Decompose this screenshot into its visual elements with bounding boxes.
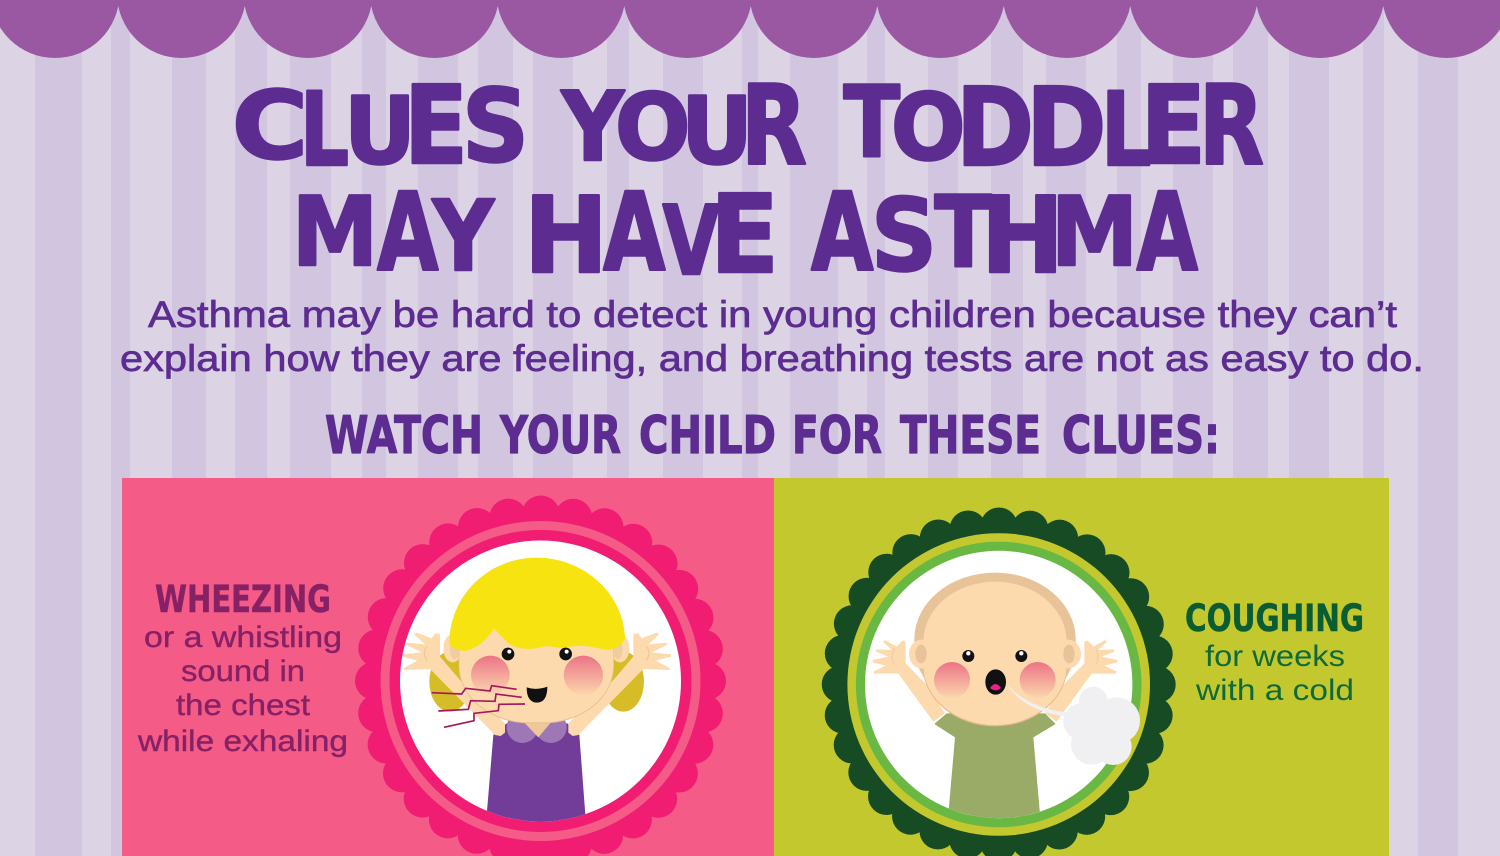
title line 1: R (1199, 62, 1264, 190)
title line 2: H (524, 175, 608, 297)
badge: wheezing girl (368, 509, 712, 853)
title line 1: D (1026, 66, 1106, 191)
intro paragraph: explain how they are feeling, and breathing tests are not as easy to do. (120, 338, 1424, 379)
title line 1: E (1140, 64, 1206, 189)
title line 1: L (300, 71, 349, 190)
title line 1: D (956, 66, 1034, 191)
title line 2: H (981, 175, 1064, 297)
wheezing description (137, 621, 348, 758)
title line 1: C (232, 72, 308, 181)
wheezing description: while exhaling (137, 725, 348, 758)
wheezing description: or a whistling (144, 621, 342, 654)
icon: wheeze lines (432, 686, 525, 727)
title line 2: M (1051, 178, 1138, 288)
wheezing description: sound in (181, 655, 305, 688)
coughing description: for weeks (1205, 640, 1345, 673)
subheading: YOUR (499, 406, 621, 466)
panel: wheezing (122, 478, 774, 856)
title line 1: S (462, 67, 529, 185)
title line 2: A (377, 171, 439, 296)
title line 2: A (811, 171, 874, 296)
curtain scallops (0, 0, 1500, 58)
title line 1: E (404, 64, 468, 189)
coughing description (1195, 640, 1354, 707)
title line 2: V (662, 187, 720, 297)
wheezing description: the chest (176, 689, 311, 722)
subheading: FOR (792, 406, 882, 466)
icon: baby (873, 573, 1140, 833)
wheezing heading: WHEEZING (155, 578, 331, 621)
panel: coughing (774, 478, 1389, 856)
title line 2: S (871, 177, 937, 294)
icon: cough puff (1007, 684, 1140, 765)
intro paragraph (120, 294, 1424, 379)
title line 2: T (934, 176, 992, 290)
title line 1: Y (561, 73, 625, 183)
badge: coughing baby (834, 520, 1164, 850)
subheading: THESE (900, 406, 1041, 466)
title line 1: U (681, 77, 753, 185)
title line 1: O (615, 74, 690, 181)
subheading: CHILD (639, 406, 776, 466)
title line 1: O (891, 74, 966, 181)
title line 2: M (292, 178, 378, 288)
title line 2: A (603, 171, 666, 296)
coughing description: with a cold (1195, 674, 1354, 707)
title line 2: E (710, 173, 779, 298)
title line 1: T (844, 66, 900, 180)
title line 2: Y (432, 180, 496, 293)
icon: girl (402, 558, 671, 823)
title line 1: U (344, 77, 416, 185)
intro paragraph: Asthma may be hard to detect in young children because they can’t (148, 294, 1398, 335)
coughing heading: COUGHING (1185, 597, 1364, 640)
subheading: WATCH (325, 406, 483, 466)
title line 1: L (1101, 71, 1152, 190)
title line 1: R (741, 62, 807, 190)
title line 2: A (1136, 171, 1198, 296)
title (232, 62, 1264, 298)
subheading: CLUES: (1062, 406, 1220, 466)
